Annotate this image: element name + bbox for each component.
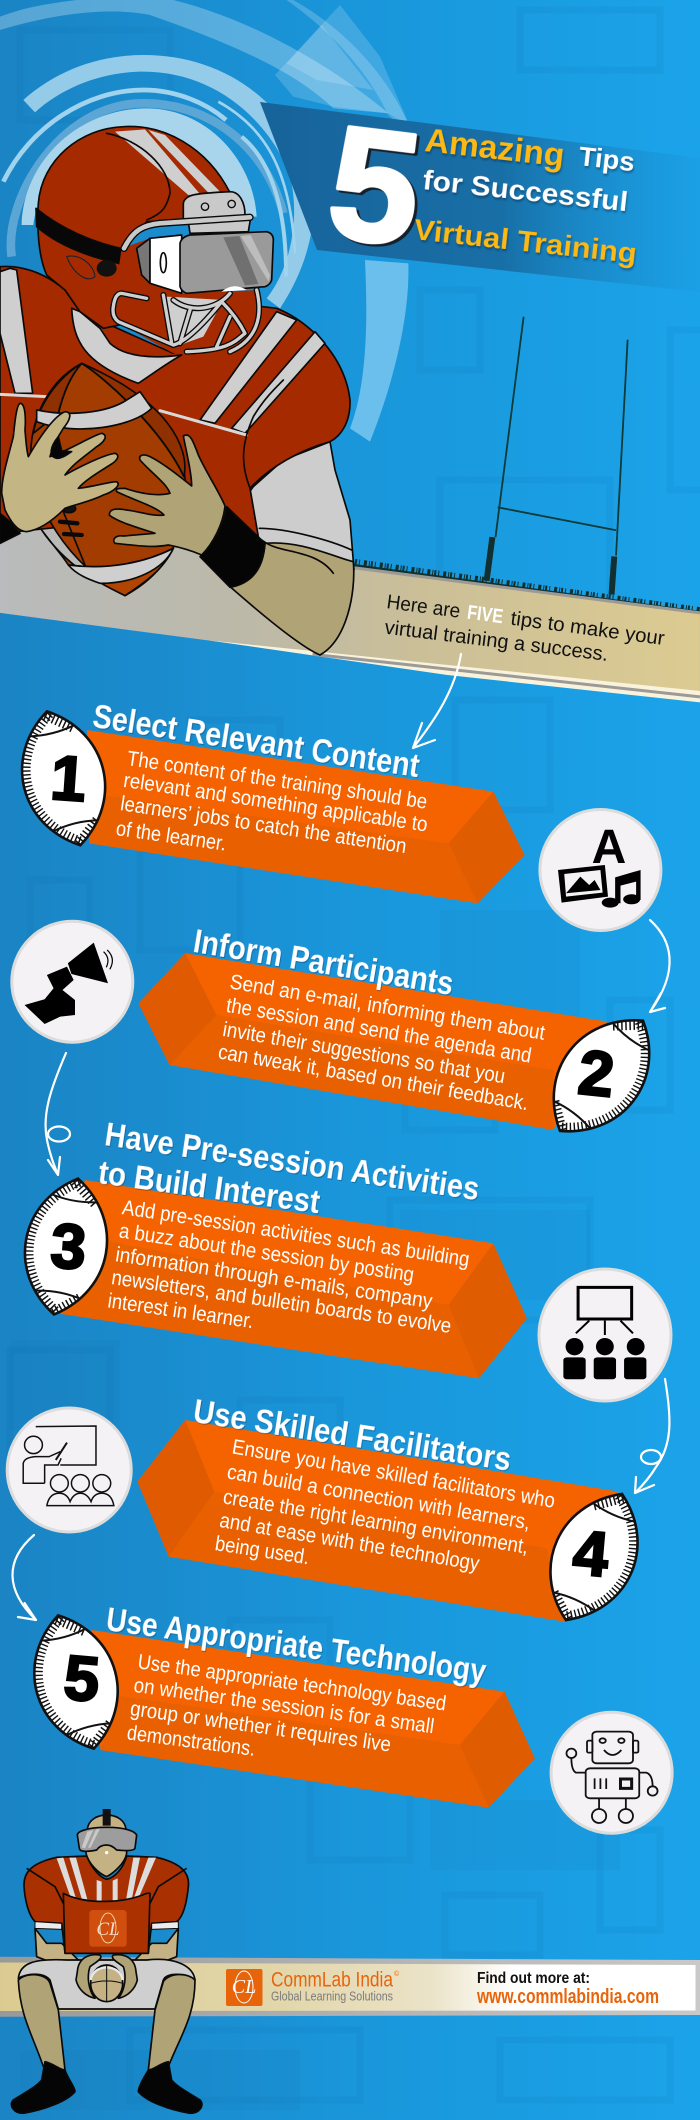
prism banner xyxy=(137,1420,618,1622)
football xyxy=(31,363,186,596)
body text: Use the appropriate technology based xyxy=(136,1650,448,1715)
body text: Send an e-mail, informing them about xyxy=(228,971,547,1045)
football number: 4 xyxy=(570,1518,611,1590)
heading: to Build Interest xyxy=(96,1153,322,1220)
body text: invite their suggestions so that you xyxy=(221,1018,507,1088)
sleeve and forearm xyxy=(230,442,354,655)
neck xyxy=(72,308,182,383)
body text: being used. xyxy=(214,1532,311,1569)
prism banner xyxy=(138,953,607,1130)
body text: can tweak it, based on their feedback. xyxy=(217,1041,530,1115)
heading: Use Skilled Facilitators xyxy=(191,1392,514,1478)
intro text: tips to make your xyxy=(509,608,666,650)
body text xyxy=(217,971,547,1115)
company name: Global Learning Solutions xyxy=(271,1989,393,2004)
body text: Ensure you have skilled facilitators who xyxy=(230,1436,557,1513)
football number xyxy=(528,996,675,1155)
seated football player xyxy=(11,1809,202,2113)
panel: tip 5 xyxy=(19,1600,535,1808)
intro text: FIVE xyxy=(466,602,504,628)
arms xyxy=(35,1928,178,1972)
jersey stripes xyxy=(0,268,325,435)
helmet xyxy=(36,126,230,328)
body text: on whether the session is for a small xyxy=(132,1674,436,1738)
football number xyxy=(19,1605,133,1759)
title banner xyxy=(260,91,700,292)
intro text: virtual training a success. xyxy=(383,617,609,666)
body text xyxy=(106,1196,471,1338)
website call to action xyxy=(476,1970,659,2008)
head xyxy=(86,1809,127,1877)
left hand xyxy=(0,403,118,543)
icon: presentation group xyxy=(539,1269,671,1401)
intro text: Here are xyxy=(385,591,462,623)
icon: megaphone xyxy=(12,921,133,1042)
title text: Virtual Training xyxy=(412,214,638,270)
footer band xyxy=(0,1957,700,2017)
prism banner xyxy=(92,1630,535,1808)
company name: © xyxy=(394,1970,400,1978)
heading: Have Pre-session Activities xyxy=(103,1115,482,1207)
website call to action: Find out more at: xyxy=(477,1970,590,1987)
legs xyxy=(18,1975,195,2070)
body text: interest in learner. xyxy=(106,1289,255,1333)
football number: 2 xyxy=(575,1037,617,1111)
logo: CL xyxy=(232,1976,256,1998)
panel: tip 1 xyxy=(8,697,525,903)
big number 5: 5 xyxy=(320,91,430,280)
body text: and at ease with the technology xyxy=(218,1509,482,1576)
heading: Inform Participants xyxy=(191,922,456,1002)
arrow: tip 4 icon to tip 5 xyxy=(12,1535,36,1620)
football number: 3 xyxy=(49,1211,88,1283)
football number xyxy=(8,702,120,855)
banner ribbon xyxy=(260,102,700,292)
shorts xyxy=(18,1959,195,2009)
right hand and wristband xyxy=(109,435,265,587)
body text xyxy=(114,747,429,858)
body text: a buzz about the session by posting xyxy=(118,1220,416,1287)
icon: content types: A xyxy=(592,821,626,874)
football player with VR headset xyxy=(0,126,354,655)
arrow: tip 2 icon to tip 3 xyxy=(46,1053,70,1175)
heading: Select Relevant Content xyxy=(90,697,422,784)
body text: demonstrations. xyxy=(126,1721,257,1761)
football number: 5 xyxy=(61,1643,102,1715)
body text: The content of the training should be xyxy=(126,747,429,814)
logo xyxy=(226,1969,262,2006)
title text: Amazing xyxy=(423,121,566,174)
body text: learners’ jobs to catch the attention xyxy=(119,792,408,858)
body text xyxy=(126,1650,448,1761)
company name xyxy=(271,1969,400,2004)
heading: Use Appropriate Technology xyxy=(104,1600,489,1690)
decorative arrows xyxy=(12,654,670,1620)
football number: 1 xyxy=(49,743,88,815)
football number xyxy=(14,1172,118,1321)
face mask xyxy=(113,238,260,353)
arrow: tip 3 icon to tip 4 xyxy=(635,1379,669,1493)
body text: group or whether it requires live xyxy=(129,1697,392,1757)
helmet and hands xyxy=(76,1955,137,2002)
body text: create the right learning environment, xyxy=(221,1486,530,1559)
body text: the session and send the agenda and xyxy=(225,994,533,1068)
jersey xyxy=(24,1856,189,1953)
icon: content types xyxy=(540,810,661,930)
prism banner xyxy=(87,730,525,903)
body text: relevant and something applicable to xyxy=(122,769,429,836)
company name: CommLab India xyxy=(271,1969,393,1992)
title text: for Successful xyxy=(421,164,629,217)
body text: Add pre-session activities such as building xyxy=(121,1196,471,1271)
icon: robot xyxy=(551,1712,672,1833)
icon: trainer and class xyxy=(7,1408,131,1532)
arrow: intro to tip 1 xyxy=(413,654,461,748)
tan ribbon strip xyxy=(0,514,700,702)
panel: tip 2 xyxy=(138,922,675,1155)
arrow: tip 1 icon to tip 2 xyxy=(650,920,670,1012)
body text: can build a connection with learners, xyxy=(225,1461,532,1534)
body text: newsletters, and bulletin boards to evolve xyxy=(110,1266,453,1338)
goal posts and grass xyxy=(355,317,700,612)
intro text xyxy=(383,591,666,666)
body text: of the learner. xyxy=(114,817,228,856)
football number xyxy=(529,1477,659,1637)
body text xyxy=(214,1436,557,1576)
seated player logo mark: CL xyxy=(96,1919,120,1940)
title text: Tips xyxy=(577,141,636,177)
goggles xyxy=(77,1827,137,1854)
title text xyxy=(412,121,638,270)
concentric rings behind player xyxy=(0,0,415,442)
prism banner xyxy=(58,1180,527,1378)
socks xyxy=(11,2062,202,2113)
panel: tip 3 xyxy=(14,1115,527,1378)
jersey xyxy=(0,266,350,537)
VR headset xyxy=(124,192,273,293)
panel: tip 4 xyxy=(137,1392,659,1637)
body text: information through e-mails, company xyxy=(114,1243,434,1313)
